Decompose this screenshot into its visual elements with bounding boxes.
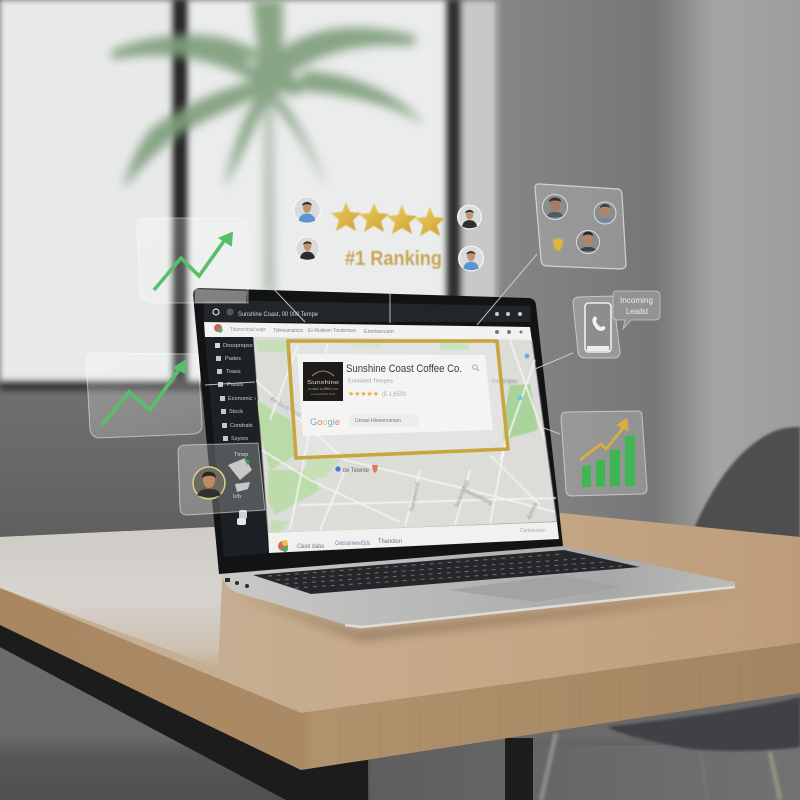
table bbox=[0, 513, 800, 800]
business logo: coast coffee co bbox=[308, 386, 339, 391]
laptop base bbox=[219, 546, 735, 628]
subtitle: Envisited Tempes bbox=[348, 378, 393, 384]
map: Tldwuusbarg bbox=[459, 486, 493, 506]
speech bubble: Leadst bbox=[626, 307, 649, 316]
sidebar: Pades bbox=[225, 356, 241, 362]
shield icon bbox=[553, 238, 563, 251]
glass panel: customer avatars bbox=[535, 184, 626, 269]
map: Souppmad bbox=[454, 480, 471, 509]
bottom status bar: Ceossomerv/Ods bbox=[335, 541, 370, 547]
avatar: top right bbox=[458, 205, 481, 229]
gold arrow bbox=[580, 420, 627, 460]
browser toolbar bbox=[204, 300, 531, 322]
google logo: Google bbox=[310, 417, 340, 428]
avatar bbox=[542, 194, 568, 220]
browser tab bar: Tdmeamatoss bbox=[273, 328, 303, 334]
green arrow bbox=[102, 361, 186, 425]
screen bezel bbox=[193, 288, 563, 574]
sidebar: Dossprepss bbox=[223, 343, 253, 349]
trackpad bbox=[449, 575, 622, 602]
sidebar: Tmep bbox=[234, 452, 248, 458]
bottom status bar: Thanoton bbox=[378, 539, 402, 545]
table frame bbox=[0, 624, 368, 800]
business logo: Sunshine bbox=[307, 380, 339, 386]
phone icon bbox=[585, 303, 611, 352]
laptop bbox=[193, 288, 738, 640]
chair bbox=[541, 427, 800, 800]
avatar bbox=[594, 202, 616, 224]
map: En Bearshop bbox=[269, 397, 303, 419]
bottom status bar bbox=[268, 522, 559, 553]
search icon bbox=[473, 365, 479, 371]
business logo: established bbox=[311, 392, 336, 396]
glass panel: profile avatar bbox=[178, 443, 265, 515]
ports bbox=[225, 578, 249, 588]
palm tree bbox=[112, 0, 424, 295]
reviewer avatars and rating bbox=[294, 197, 483, 271]
glass panel: lower trend arrow bbox=[86, 353, 202, 438]
sidebar: Condrats bbox=[230, 423, 253, 429]
sidebar: Stock bbox=[229, 409, 243, 415]
sidebar bbox=[205, 337, 268, 557]
browser tab bar: Ex Mudeem Tmatomsac bbox=[308, 328, 356, 334]
map pin label bbox=[335, 465, 378, 474]
speech bubble bbox=[613, 291, 660, 329]
sidebar: Economic › bbox=[228, 396, 256, 402]
map pin label: ɒe Tewnte bbox=[343, 468, 370, 474]
business logo bbox=[303, 362, 343, 401]
sidebar: Ir/b bbox=[233, 494, 241, 500]
map bbox=[253, 337, 557, 534]
reflection on table bbox=[0, 527, 222, 668]
speech bubble: Incoming bbox=[620, 296, 653, 305]
map: Sorrpreend bbox=[409, 482, 421, 512]
ranking label: #1 Ranking bbox=[345, 248, 442, 270]
glass panel: upper trend arrow bbox=[137, 218, 248, 303]
business name: Sunshine Coast Coffee Co. bbox=[346, 363, 462, 375]
connector lines bbox=[205, 254, 573, 434]
gold stars bbox=[331, 202, 445, 236]
avatar bbox=[576, 230, 600, 254]
review count: (5 1,6500 bbox=[382, 392, 407, 398]
sidebar: Passls bbox=[227, 382, 244, 388]
avatar bbox=[193, 467, 225, 499]
mini map fragment bbox=[228, 458, 252, 492]
sidebar: Ssyors bbox=[231, 436, 248, 442]
avatar: bottom left bbox=[296, 237, 319, 260]
green arrow bbox=[154, 233, 232, 290]
bottom status bar: Ciaod olaba bbox=[297, 544, 325, 550]
map: Irvvenpas bbox=[492, 379, 518, 385]
glass panel: phone bbox=[573, 291, 660, 358]
keyboard bbox=[253, 550, 640, 594]
bottom status bar: Cartanusion bbox=[520, 528, 546, 534]
glass panel: bar chart bbox=[561, 411, 647, 496]
table edge bbox=[0, 588, 800, 770]
avatar: top left bbox=[294, 197, 320, 223]
business card bbox=[297, 354, 493, 436]
table surface bbox=[0, 513, 800, 713]
laptop shadow bbox=[230, 592, 738, 640]
map: Amoss bbox=[526, 502, 540, 521]
business card: Unvao Hloeenoenon bbox=[355, 418, 401, 424]
avatar: bottom right bbox=[459, 246, 483, 271]
green bars bbox=[582, 435, 635, 487]
table leg back bbox=[505, 738, 533, 800]
button bbox=[350, 414, 418, 427]
browser toolbar: Sunshine Coast, 00 000 Tempe bbox=[238, 312, 319, 318]
browser tab bar: Emotwocam bbox=[364, 329, 394, 335]
review stars: ★★★★★ bbox=[348, 390, 379, 398]
browser tab bar: Tdumcrmaicuage bbox=[230, 327, 266, 333]
browser tab bar bbox=[204, 322, 532, 341]
gold highlight frame bbox=[288, 341, 508, 458]
sidebar: Toass bbox=[226, 369, 241, 375]
